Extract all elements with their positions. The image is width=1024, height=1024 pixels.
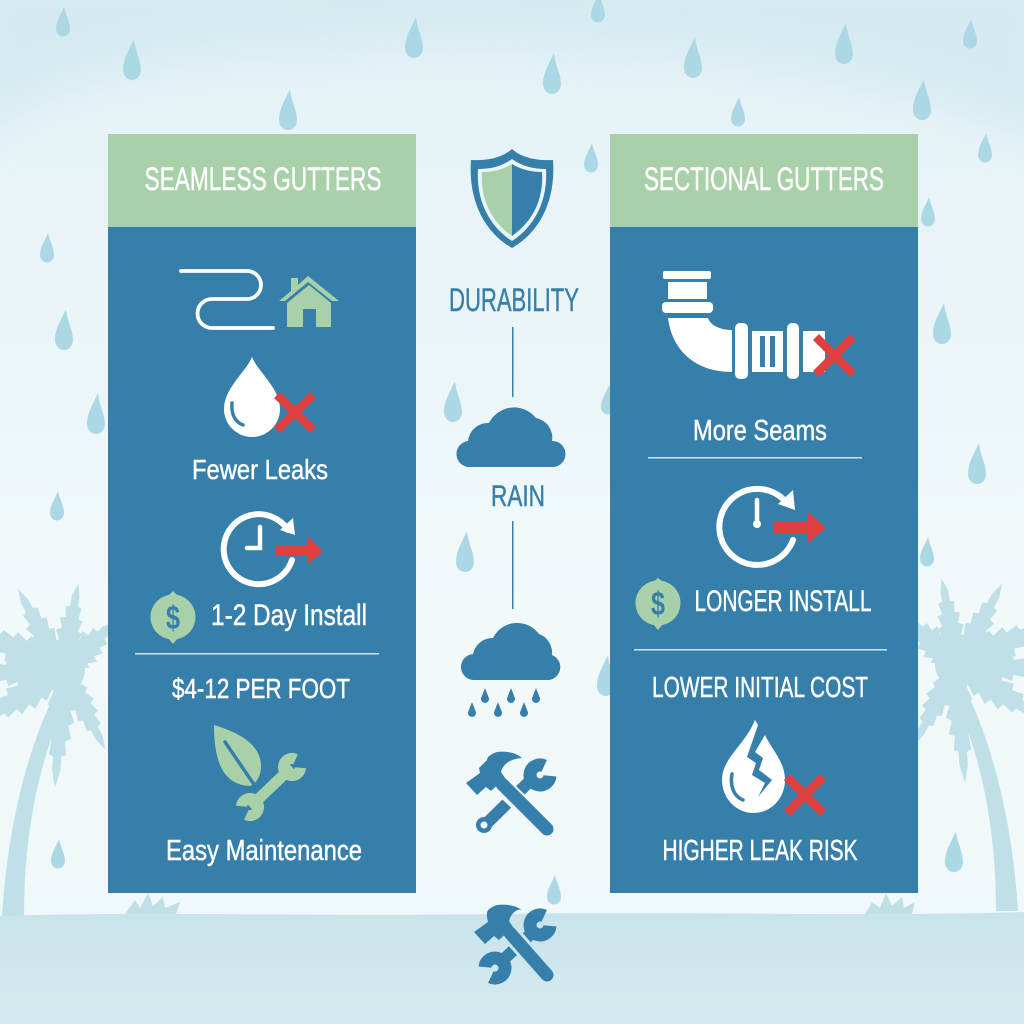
icon: clock with arrow [224,514,323,584]
connector [512,327,514,397]
icon: hammer and wrench lower [474,905,550,978]
divider [135,653,379,654]
icon: rain cloud [461,623,560,717]
icon: clock with arrow [719,489,826,565]
sectional header: SECTIONAL GUTTERS [644,161,884,197]
text: fewer leaks: Fewer Leaks [192,454,328,485]
icon: pipe with cross [662,271,853,379]
panel: seamless gutters [108,134,416,893]
divider [648,457,862,458]
text: price: $4-12 PER FOOT [172,673,350,704]
panel: sectional gutters [610,134,918,893]
icon: dollar coin [636,578,680,630]
text: easy maintenance: Easy Maintenance [166,835,362,867]
seamless panel body [108,226,416,893]
icon: shield [471,149,553,248]
seamless header [108,134,416,227]
seamless header: SEAMLESS GUTTERS [144,161,382,197]
upper sky wash [0,0,1024,150]
icon: cloud [456,407,566,467]
label: rain: RAIN [491,480,545,513]
ground water band [0,912,1024,1024]
text: longer install: LONGER INSTALL [694,585,872,618]
icon: dollar coin [150,591,196,644]
text: lower initial cost: LOWER INITIAL COST [652,672,868,704]
icon: hammer and wrench [466,752,550,833]
icon: water drop with cross [224,357,313,437]
icon: house [279,276,339,327]
icon: cracked drop with cross [722,720,823,813]
sectional header [610,134,918,227]
text: higher leak risk: HIGHER LEAK RISK [662,835,858,867]
icon: dollar coin: $ [166,599,180,636]
palm tree left [0,581,126,916]
divider [634,649,887,650]
sectional panel body [610,226,918,893]
icon: seamless gutter line [181,271,273,328]
panel: center comparison column [449,149,579,978]
label: durability: DURABILITY [449,282,579,318]
shrubs [125,893,915,914]
text: install time: 1-2 Day Install [211,599,367,632]
icon: dollar coin: $ [651,585,665,622]
palm tree right [894,576,1024,911]
icon: leaf and wrench [214,725,300,816]
text: more seams: More Seams [693,415,827,447]
connector [512,521,514,609]
